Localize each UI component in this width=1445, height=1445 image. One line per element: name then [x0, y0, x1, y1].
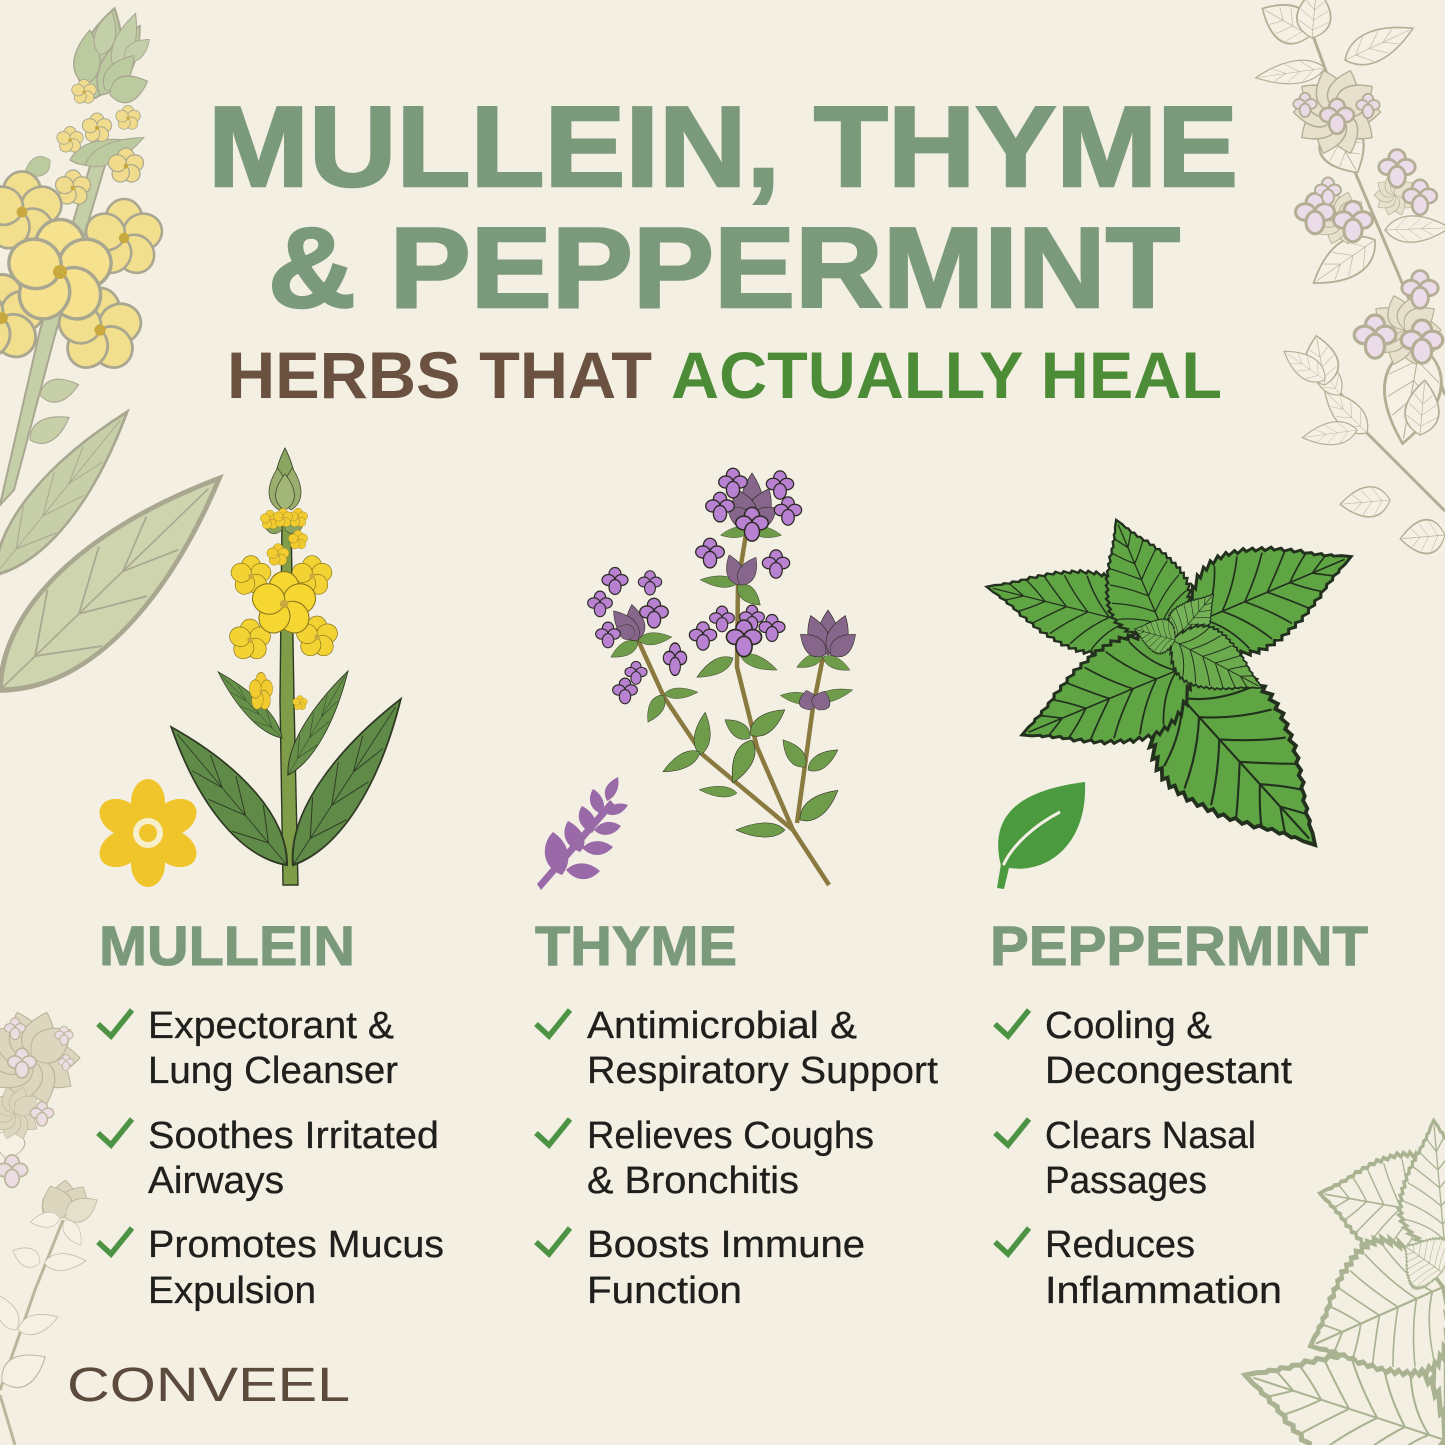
brand logo: CONVEEL	[67, 1359, 350, 1412]
subtitle: HERBS THAT	[227, 338, 652, 412]
list: mullein benefits: Expulsion	[148, 1270, 316, 1312]
list: mullein benefits: Soothes Irritated	[148, 1115, 439, 1157]
list: peppermint benefits: Decongestant	[1045, 1050, 1292, 1092]
decoration: pale mint bottom right	[1225, 1117, 1445, 1445]
list: mullein benefits: Expectorant &	[148, 1005, 394, 1047]
icon: purple sprig	[537, 777, 628, 890]
list: peppermint benefits	[995, 1005, 1292, 1312]
heading: mullein: MULLEIN	[99, 914, 355, 977]
title: MULLEIN, THYME	[208, 84, 1238, 211]
list: peppermint benefits: Reduces	[1045, 1224, 1195, 1266]
list: thyme benefits: Function	[587, 1270, 742, 1312]
decoration: pale thyme bottom left	[0, 1007, 103, 1445]
list: peppermint benefits: Clears Nasal	[1045, 1115, 1256, 1157]
illustration: mullein plant	[154, 448, 420, 885]
heading: peppermint: PEPPERMINT	[990, 914, 1368, 977]
heading: thyme: THYME	[535, 914, 737, 977]
illustration: thyme sprig	[588, 468, 862, 885]
list: mullein benefits: Airways	[148, 1160, 284, 1202]
title: & PEPPERMINT	[268, 205, 1180, 332]
list: thyme benefits: Boosts Immune	[587, 1224, 865, 1266]
subtitle	[227, 338, 1222, 412]
illustration: peppermint leaves	[977, 503, 1372, 892]
icon: yellow flower	[93, 779, 203, 887]
decoration: pale thyme top right	[1253, 0, 1445, 556]
list: thyme benefits: & Bronchitis	[587, 1160, 799, 1202]
icon: green leaf	[997, 782, 1085, 889]
list: thyme benefits: Relieves Coughs	[587, 1115, 874, 1157]
list: thyme benefits: Respiratory Support	[587, 1050, 938, 1092]
list: mullein benefits	[98, 1005, 444, 1312]
list: mullein benefits: Lung Cleanser	[148, 1050, 398, 1092]
subtitle: ACTUALLY HEAL	[671, 338, 1222, 412]
list: mullein benefits: Promotes Mucus	[148, 1224, 444, 1266]
list: thyme benefits: Antimicrobial &	[587, 1005, 857, 1047]
list: peppermint benefits: Cooling &	[1045, 1005, 1212, 1047]
title	[208, 84, 1238, 332]
list: peppermint benefits: Inflammation	[1045, 1270, 1282, 1312]
list: thyme benefits	[536, 1005, 938, 1312]
list: peppermint benefits: Passages	[1045, 1160, 1207, 1202]
decoration: large mullein top left	[0, 3, 249, 721]
